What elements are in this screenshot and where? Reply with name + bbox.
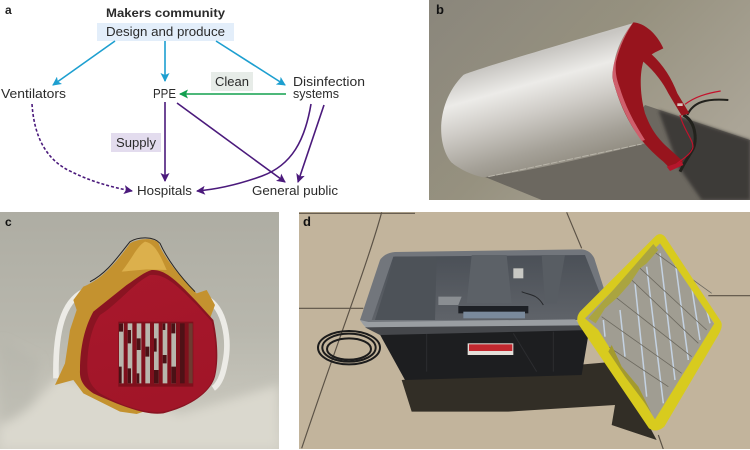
arrow: design to ventilators bbox=[53, 41, 115, 85]
icon: filter grille bbox=[118, 322, 193, 387]
label: Disinfection: Disinfection bbox=[293, 75, 365, 89]
panel a: makers community flow diagram bbox=[1, 3, 365, 198]
panel label a: a bbox=[5, 3, 12, 17]
box: Design and produce: Design and produce bbox=[106, 25, 225, 39]
arrow: disinfection to PPE bbox=[180, 93, 286, 95]
arrow: design to PPE bbox=[164, 41, 166, 81]
cast shadow bbox=[452, 105, 750, 200]
label: PPE: PPE bbox=[153, 87, 176, 101]
lid ring bbox=[577, 234, 722, 430]
panel label b: b bbox=[436, 2, 444, 17]
heading: Makers community: Makers community bbox=[106, 6, 225, 20]
panel d: photo of UV disinfection box bbox=[299, 212, 750, 449]
icon: black cable coil bbox=[318, 331, 380, 364]
panel label c: c bbox=[5, 215, 12, 229]
arrow: PPE to hospitals bbox=[164, 102, 166, 181]
label: Ventilators: Ventilators bbox=[1, 87, 66, 101]
icon: clear visor bbox=[441, 23, 646, 177]
arrow: PPE to general public bbox=[177, 103, 285, 182]
fabric folds bbox=[6, 400, 20, 412]
box: Design and produce bbox=[97, 23, 234, 41]
visor bottom edge highlight bbox=[488, 144, 642, 177]
icon: gold mask body bbox=[55, 239, 215, 414]
shadow under tub bbox=[402, 362, 657, 440]
arrow: design to disinfection systems bbox=[216, 41, 285, 85]
icon: red frame and strap bbox=[613, 22, 728, 172]
icon: red filter cover bbox=[80, 270, 217, 414]
icon: storage tub bbox=[360, 249, 604, 380]
panel label d: d bbox=[303, 214, 311, 229]
tag: Supply: Supply bbox=[116, 136, 157, 150]
icon: elastic straps bbox=[56, 292, 227, 388]
tag: Clean: Clean bbox=[215, 75, 249, 89]
label: General public: General public bbox=[252, 184, 338, 198]
icon: yellow lid with wire grid bbox=[577, 234, 722, 430]
tag: Clean bbox=[211, 72, 253, 91]
arrow: disinfection to general public bbox=[298, 105, 324, 182]
label: Hospitals: Hospitals bbox=[137, 184, 192, 198]
panel b: photo of face shield bbox=[429, 0, 750, 200]
panel c: photo of 3D printed mask bbox=[0, 212, 279, 449]
dashed arrow: ventilators to hospitals bbox=[32, 104, 132, 191]
pavement joints bbox=[299, 212, 750, 449]
tub label bbox=[468, 343, 513, 355]
tag: Supply bbox=[111, 133, 161, 152]
arrow: disinfection to hospitals bbox=[197, 104, 311, 191]
label: systems: systems bbox=[293, 87, 339, 101]
icon: mask black edge bbox=[90, 238, 195, 292]
